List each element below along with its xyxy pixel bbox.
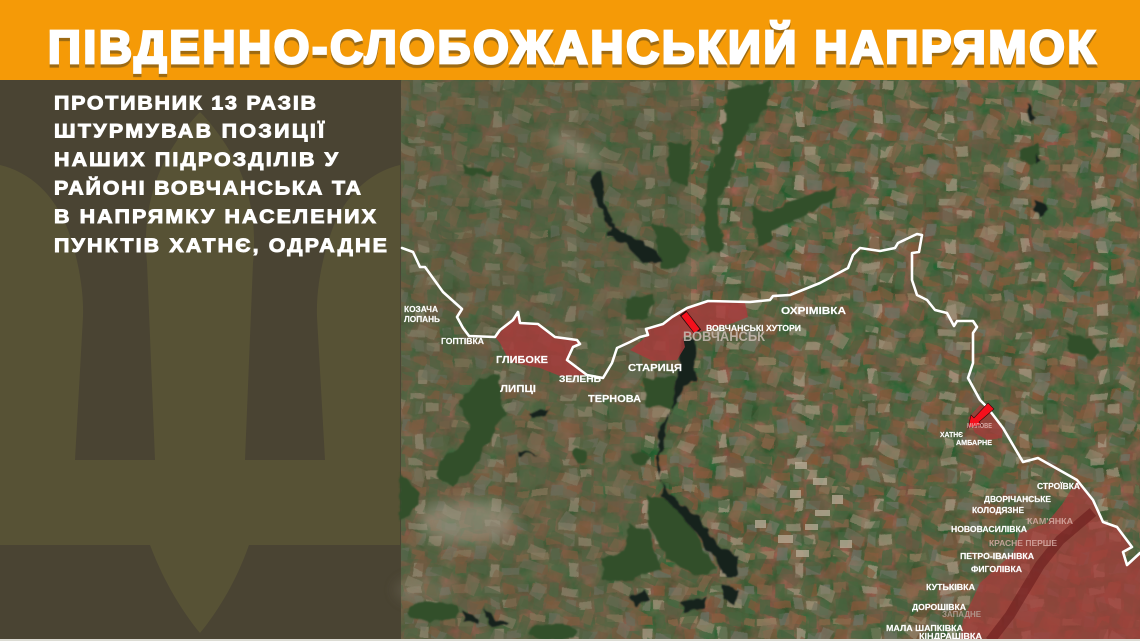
village labels: ГЛИБОКЕ xyxy=(496,354,548,366)
village labels: НОВОВАСИЛІВКА xyxy=(951,525,1027,534)
river in red zone xyxy=(990,512,1093,641)
header bar xyxy=(0,0,1140,80)
village labels: АМБАРНЕ xyxy=(956,438,992,447)
red occupied zone: Hlyboke xyxy=(495,312,587,376)
body text: ПУНКТІВ ХАТНЄ, ОДРАДНЕ xyxy=(54,235,387,257)
village labels: ЛИПЦІ xyxy=(500,383,536,395)
village labels: ДВОРІЧАНСЬКЕ xyxy=(984,495,1052,504)
red occupied zone: Khatnie xyxy=(968,405,1003,440)
bottom edge strip xyxy=(0,639,1140,641)
red occupied zone: Vovchansk xyxy=(630,301,748,361)
map: forests xyxy=(400,82,1100,640)
village labels: ТЕРНОВА xyxy=(588,393,641,405)
front line xyxy=(402,234,1140,565)
red occupied zone: south-east xyxy=(960,480,1140,641)
village labels: ЗАПАДНЕ xyxy=(942,610,982,619)
village labels: ГОПТІВКА xyxy=(441,336,484,346)
map: warm wash xyxy=(401,80,1140,641)
arrow: Vovchansk attack xyxy=(683,313,698,332)
arrow fill: Vovchansk attack xyxy=(684,314,697,331)
village labels: ВОВЧАНСЬКІ ХУТОРИ xyxy=(706,324,801,333)
village labels: МАЛА ШАПКІВКА xyxy=(886,624,963,633)
village labels: ФИГОЛІВКА xyxy=(971,565,1022,574)
village labels: ДОРОШІВКА xyxy=(912,603,966,612)
village labels: КРАСНЕ ПЕРШЕ xyxy=(989,539,1058,548)
village labels: ВОВЧАНСЬК xyxy=(683,329,766,344)
left panel background xyxy=(0,80,401,641)
village labels: КОЛОДЯЗНЕ xyxy=(972,506,1025,515)
map: farm field patches xyxy=(401,80,1140,641)
map: muted southwestern terrain xyxy=(401,380,641,641)
arrow: Khatnie attack xyxy=(968,403,994,428)
map: towns xyxy=(395,126,740,604)
village labels: ОХРІМІВКА xyxy=(781,305,846,317)
body text: ПРОТИВНИК 13 РАЗІВ xyxy=(54,92,316,114)
village labels: ЛОПАНЬ xyxy=(404,314,440,324)
map: muted western terrain xyxy=(401,80,691,380)
village labels: КІНДРАШІВКА xyxy=(919,632,982,641)
village labels: МИЛОВЕ xyxy=(967,423,992,430)
village labels: КАМ'ЯНКА xyxy=(1027,517,1073,526)
map: reservoirs and rivers xyxy=(462,105,1048,628)
village labels xyxy=(404,304,1080,641)
village labels: КОЗАЧА xyxy=(404,304,438,314)
village labels: СТРОЇВКА xyxy=(1037,482,1080,491)
village labels: КУТЬКІВКА xyxy=(926,583,975,592)
satellite map xyxy=(395,80,1140,641)
body text: НАШИХ ПІДРОЗДІЛІВ У xyxy=(54,149,338,171)
icon: faded trident emblem xyxy=(0,112,400,633)
map: light fields southeast xyxy=(755,462,852,557)
village labels: СТАРИЦЯ xyxy=(628,362,682,374)
title: ПІВДЕННО-СЛОБОЖАНСЬКИЙ НАПРЯМОК xyxy=(48,21,1096,73)
village labels: ПЕТРО-ІВАНІВКА xyxy=(960,552,1034,561)
body text: ШТУРМУВАВ ПОЗИЦІЇ xyxy=(54,120,325,142)
village labels: ХАТНЄ xyxy=(940,430,964,439)
body text: В НАПРЯМКУ НАСЕЛЕНИХ xyxy=(54,206,376,228)
body text: РАЙОНІ ВОВЧАНСЬКА ТА xyxy=(54,176,361,199)
village labels: ЗЕЛЕНЬ xyxy=(559,374,601,385)
map: terrain base xyxy=(401,80,1140,641)
body text xyxy=(54,92,387,257)
